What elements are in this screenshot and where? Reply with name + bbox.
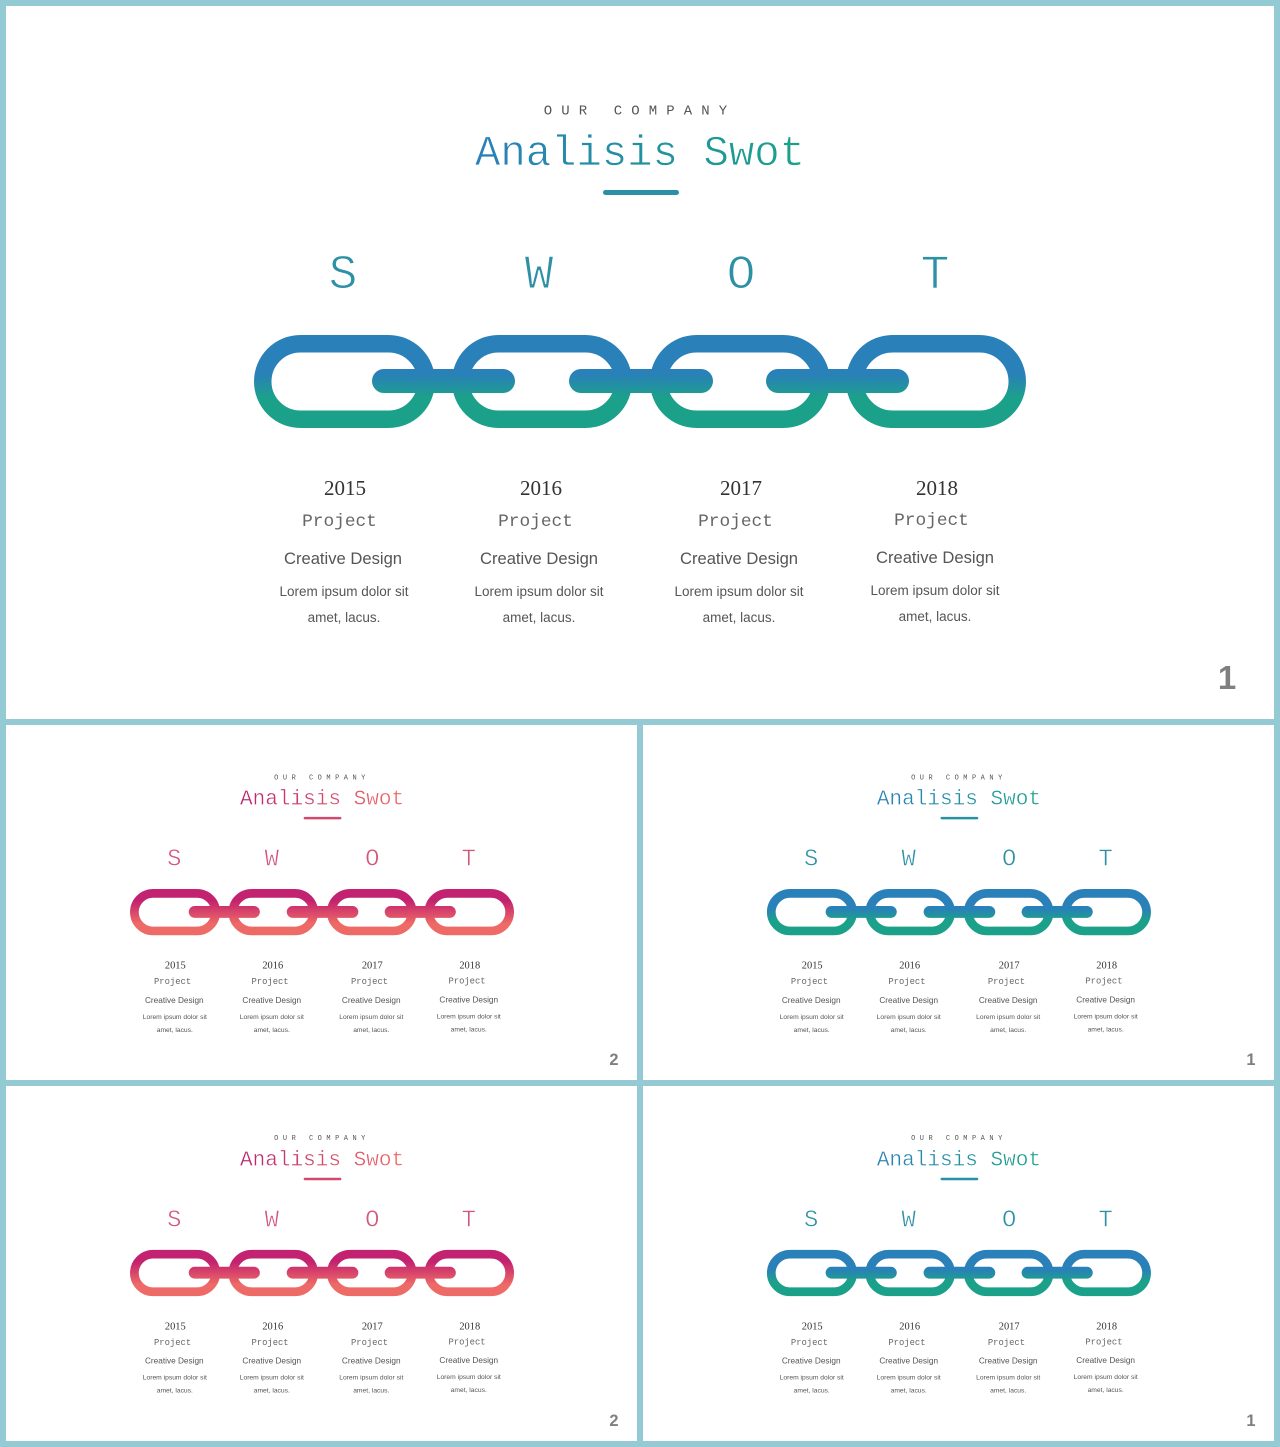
column: 2017: Lorem ipsum dolor sit (339, 1375, 403, 1382)
scaled slide content (771, 774, 1255, 1069)
column: 2016 (877, 1321, 941, 1395)
column: 2017: amet, lacus. (990, 1027, 1026, 1034)
SWOT letters: W (902, 1207, 917, 1234)
SWOT letters: O (365, 847, 379, 874)
page number: 1 (1246, 1051, 1255, 1069)
column: 2018: 2018 (1096, 961, 1117, 972)
column: 2015: amet, lacus. (157, 1388, 193, 1395)
column: 2018 (437, 961, 501, 1033)
column: 2017: 2017 (720, 476, 762, 500)
column: 2016: Project (498, 512, 573, 532)
panel: small slide top left (pink) (6, 725, 637, 1080)
column: 2016: Creative Design (879, 996, 938, 1005)
column: 2018: amet, lacus. (451, 1387, 487, 1394)
column: 2016 (240, 961, 304, 1034)
column: 2016: Creative Design (242, 1357, 302, 1366)
title underline (941, 817, 978, 819)
column: 2018: Lorem ipsum dolor sit (437, 1374, 501, 1381)
eyebrow: our company: OUR COMPANY (911, 774, 1007, 782)
column: 2015: 2015 (165, 961, 186, 972)
SWOT letters: S (804, 847, 818, 874)
column: 2016 (474, 476, 604, 625)
column: 2016: Creative Design (480, 549, 598, 568)
SWOT letters: O (727, 249, 755, 303)
column: 2018: Project (448, 1337, 486, 1347)
title: Analisis Swot (240, 1148, 404, 1172)
title underline (603, 190, 679, 195)
column: 2015: Lorem ipsum dolor sit (143, 1014, 207, 1021)
eyebrow: our company: OUR COMPANY (274, 1135, 370, 1143)
column: 2015: Creative Design (782, 996, 841, 1005)
column: 2018: Lorem ipsum dolor sit (1074, 1374, 1138, 1381)
column: 2016: Lorem ipsum dolor sit (474, 584, 604, 599)
column: 2015: 2015 (802, 961, 823, 972)
column: 2016: 2016 (262, 1321, 283, 1332)
chain graphic (771, 893, 1147, 931)
SWOT letters: S (167, 847, 181, 874)
column: 2017: Creative Design (979, 996, 1038, 1005)
column: 2015 (143, 961, 207, 1034)
column: 2017 (339, 961, 403, 1034)
column: 2018: Creative Design (876, 548, 994, 567)
SWOT letters (167, 847, 476, 874)
column: 2015: amet, lacus. (794, 1388, 830, 1395)
column: 2018: Creative Design (1076, 995, 1135, 1004)
column: 2016: 2016 (899, 1321, 920, 1332)
title underline (304, 1178, 341, 1180)
column: 2018 (1074, 1321, 1138, 1394)
SWOT letters (167, 1207, 476, 1234)
title underline (304, 817, 341, 819)
column: 2016: amet, lacus. (254, 1388, 290, 1395)
column: 2015: amet, lacus. (157, 1027, 193, 1034)
column: 2016: 2016 (262, 961, 283, 972)
column: 2016: amet, lacus. (503, 610, 575, 625)
column: 2015: Project (791, 1338, 828, 1348)
column: 2015: Project (154, 1338, 191, 1348)
SWOT letters: T (462, 847, 476, 874)
column: 2017 (976, 961, 1040, 1034)
SWOT letters: O (1002, 1207, 1016, 1234)
column: 2018 (1074, 961, 1138, 1033)
column: 2018: amet, lacus. (451, 1026, 487, 1033)
panel: main slide (blue) (6, 6, 1274, 719)
column: 2015: Creative Design (145, 1357, 204, 1366)
column: 2015 (780, 1321, 844, 1395)
SWOT letters: S (167, 1207, 181, 1234)
column: 2016: amet, lacus. (891, 1027, 927, 1034)
column: 2017: Creative Design (680, 549, 798, 568)
column: 2017: Creative Design (979, 1357, 1038, 1366)
column: 2018 (870, 476, 1000, 624)
column: 2017: Creative Design (342, 1357, 401, 1366)
column: 2017: Project (698, 512, 773, 532)
column: 2015: Lorem ipsum dolor sit (143, 1375, 207, 1382)
column: 2018: amet, lacus. (899, 609, 971, 624)
column: 2018: Project (1085, 977, 1123, 987)
column: 2017: amet, lacus. (353, 1388, 389, 1395)
title: Analisis Swot (877, 787, 1041, 811)
column: 2017: Lorem ipsum dolor sit (339, 1014, 403, 1021)
column: 2016: Project (888, 1338, 926, 1348)
column: 2018: Creative Design (1076, 1356, 1135, 1365)
SWOT letters (804, 847, 1113, 874)
title: Analisis Swot (877, 1148, 1041, 1172)
SWOT letters: T (462, 1207, 476, 1234)
column: 2017: amet, lacus. (990, 1388, 1026, 1395)
column: 2017: Lorem ipsum dolor sit (976, 1014, 1040, 1021)
column: 2016: 2016 (899, 961, 920, 972)
column: 2016: Project (888, 977, 926, 987)
column: 2015: 2015 (802, 1321, 823, 1332)
SWOT letters: W (265, 847, 280, 874)
column: 2017: Project (988, 1338, 1025, 1348)
column: 2017 (976, 1321, 1040, 1395)
column: 2018: 2018 (459, 961, 480, 972)
chain graphic (263, 344, 1017, 419)
column: 2016: Creative Design (242, 996, 302, 1005)
column: 2018: 2018 (916, 476, 958, 500)
column: 2018: Creative Design (439, 995, 499, 1004)
column: 2016: Lorem ipsum dolor sit (240, 1375, 304, 1382)
column: 2017 (674, 476, 804, 625)
panel: small slide top right (blue) (643, 725, 1274, 1080)
page number: 1 (1218, 659, 1236, 696)
column: 2017: Lorem ipsum dolor sit (674, 584, 804, 599)
SWOT letters (329, 249, 949, 303)
SWOT letters: O (365, 1207, 379, 1234)
column: 2017: 2017 (999, 961, 1020, 972)
SWOT letters: W (265, 1207, 280, 1234)
panel: small slide bottom left (pink) (6, 1086, 637, 1441)
column: 2016: Lorem ipsum dolor sit (877, 1375, 941, 1382)
column: 2015: amet, lacus. (794, 1027, 830, 1034)
column: 2015: 2015 (324, 476, 366, 500)
scaled slide content (771, 1135, 1255, 1430)
column: 2015 (279, 476, 409, 625)
column: 2015: 2015 (165, 1321, 186, 1332)
column: 2016: amet, lacus. (254, 1027, 290, 1034)
column: 2015: Project (302, 512, 377, 532)
column: 2017: amet, lacus. (703, 610, 775, 625)
column: 2016: Lorem ipsum dolor sit (240, 1014, 304, 1021)
column: 2018: Project (448, 977, 486, 987)
column: 2015: Creative Design (284, 549, 402, 568)
column: 2017: Project (988, 977, 1025, 987)
column: 2015: Project (154, 977, 191, 987)
eyebrow: our company: OUR COMPANY (274, 774, 370, 782)
scaled slide content (134, 1135, 619, 1430)
column: 2016 (240, 1321, 304, 1395)
page number: 2 (609, 1051, 619, 1069)
column: 2017: Creative Design (342, 996, 401, 1005)
column: 2016: 2016 (520, 476, 562, 500)
column: 2017: Project (351, 977, 388, 987)
eyebrow: our company: OUR COMPANY (544, 104, 736, 120)
column: 2017: Lorem ipsum dolor sit (976, 1375, 1040, 1382)
column: 2016 (877, 961, 941, 1034)
column: 2016: amet, lacus. (891, 1388, 927, 1395)
column: 2017: Project (351, 1338, 388, 1348)
column: 2017: 2017 (999, 1321, 1020, 1332)
chain graphic (134, 1254, 510, 1292)
column: 2016: Project (251, 1338, 289, 1348)
column: 2018: Lorem ipsum dolor sit (1074, 1013, 1138, 1020)
column: 2015: Creative Design (145, 996, 204, 1005)
column: 2016: Lorem ipsum dolor sit (877, 1014, 941, 1021)
column: 2018 (437, 1321, 501, 1394)
SWOT letters: W (525, 249, 554, 303)
SWOT letters: S (804, 1207, 818, 1234)
column: 2018: amet, lacus. (1088, 1387, 1124, 1394)
column: 2018: Project (894, 511, 969, 531)
column: 2018: 2018 (1096, 1321, 1117, 1332)
column: 2018: amet, lacus. (1088, 1026, 1124, 1033)
column: 2016: Project (251, 977, 289, 987)
SWOT letters: W (902, 847, 917, 874)
page number: 1 (1246, 1412, 1255, 1430)
page number: 2 (609, 1412, 619, 1430)
scaled slide content (134, 774, 619, 1069)
column: 2018: 2018 (459, 1321, 480, 1332)
panel: small slide bottom right (blue) (643, 1086, 1274, 1441)
title: Analisis Swot (475, 130, 805, 178)
SWOT letters: S (329, 249, 357, 303)
column: 2018: Creative Design (439, 1356, 499, 1365)
column: 2017: 2017 (362, 961, 383, 972)
column: 2015 (143, 1321, 207, 1395)
column: 2018: Lorem ipsum dolor sit (870, 583, 1000, 598)
column: 2017: amet, lacus. (353, 1027, 389, 1034)
column: 2015: Project (791, 977, 828, 987)
title underline (941, 1178, 978, 1180)
column: 2017 (339, 1321, 403, 1395)
SWOT letters: T (1099, 847, 1113, 874)
SWOT letters: T (921, 249, 949, 303)
eyebrow: our company: OUR COMPANY (911, 1135, 1007, 1143)
SWOT letters: O (1002, 847, 1016, 874)
column: 2015: amet, lacus. (308, 610, 380, 625)
column: 2018: Project (1085, 1337, 1123, 1347)
title: Analisis Swot (240, 787, 404, 811)
column: 2017: 2017 (362, 1321, 383, 1332)
column: 2015 (780, 961, 844, 1034)
chain graphic (134, 893, 510, 931)
column: 2015: Lorem ipsum dolor sit (780, 1014, 844, 1021)
column: 2015: Creative Design (782, 1357, 841, 1366)
column: 2015: Lorem ipsum dolor sit (279, 584, 409, 599)
SWOT letters: T (1099, 1207, 1113, 1234)
chain graphic (771, 1254, 1147, 1292)
column: 2015: Lorem ipsum dolor sit (780, 1375, 844, 1382)
column: 2016: Creative Design (879, 1357, 938, 1366)
SWOT letters (804, 1207, 1113, 1234)
column: 2018: Lorem ipsum dolor sit (437, 1013, 501, 1020)
